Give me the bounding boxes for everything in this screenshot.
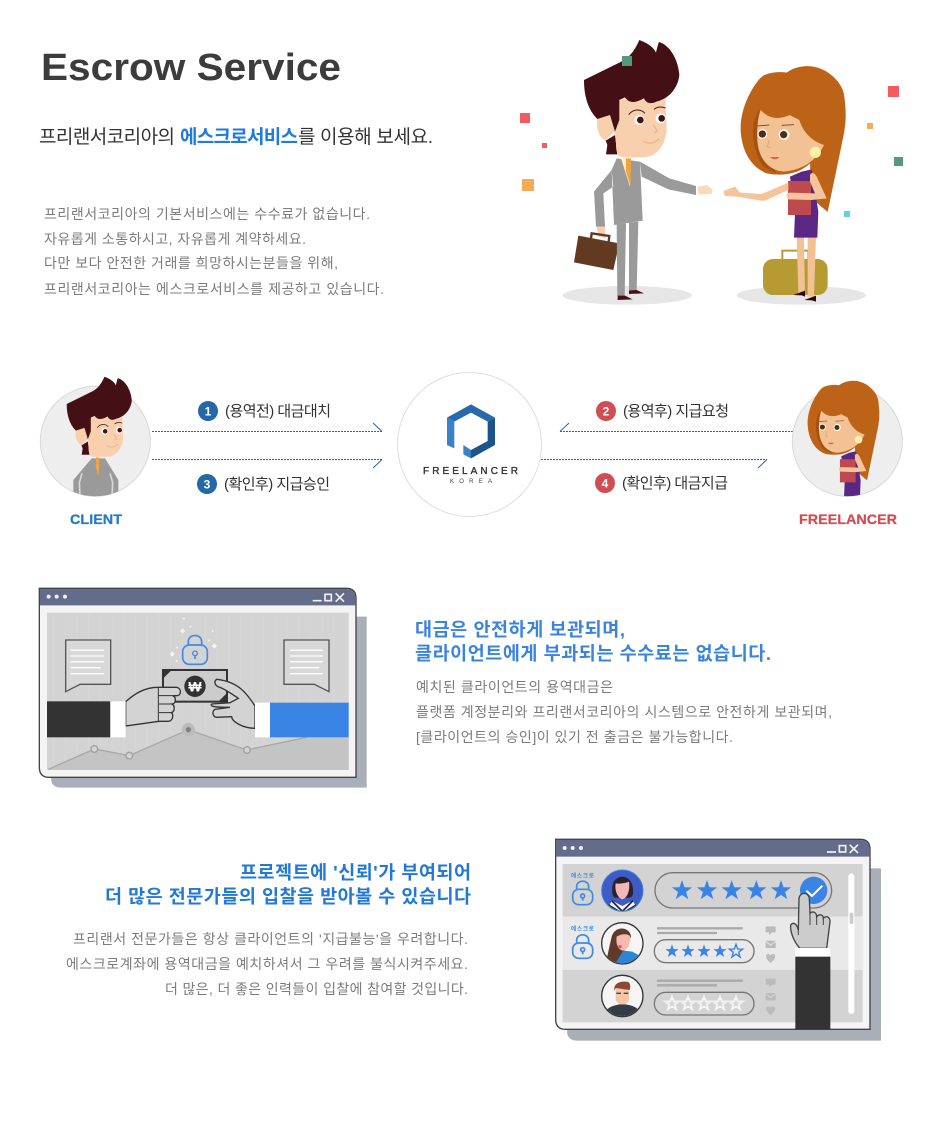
section heading: trust [105,862,471,907]
arrow: platform to freelancer [541,460,767,468]
step 4 label: 4 [602,476,609,490]
window illustration: rating list [556,839,881,1041]
row 1 escrow badge [571,871,594,905]
man character [563,40,713,305]
row 2 escrow badge: 에스크로 [571,924,594,932]
client avatar [40,377,150,497]
subtitle: 에스크로서비스 [180,126,298,148]
arrow: client to platform bottom [152,460,382,468]
row 3 contact icons [766,979,776,1015]
section text: safe custody [416,679,832,745]
section text: trust: 더 많은, 더 좋은 인력들이 입찰에 참여할 것입니다. [165,981,468,997]
platform logo circle: KOREA [450,479,492,485]
row 3 rating pill [654,992,754,1015]
section text: safe custody: 예치된 클라이언트의 용역대금은 [416,679,613,695]
step 4 label: (확인후) 대금지급 [622,475,728,492]
label: freelancer: FREELANCER [799,511,897,527]
arrow: client to platform top [152,423,382,432]
hero illustration: handshake [520,40,903,305]
woman character [723,66,866,305]
row 2 rating pill [654,940,754,963]
subtitle [39,126,433,148]
subtitle: 를 이용해 보세요. [298,126,433,148]
row 2 contact icons [766,926,776,963]
freelancer avatar [792,381,902,498]
section heading: trust: 더 많은 전문가들의 입찰을 받아볼 수 있습니다 [105,886,471,907]
section text: trust [66,931,468,997]
row 1 escrow badge: 에스크로 [571,871,594,879]
client hand with dark sleeve [47,687,180,737]
step 2 label: 2 [603,404,610,418]
confetti squares [520,56,903,217]
line chart [48,723,349,770]
scrollbar [848,873,854,1014]
label: client: CLIENT [70,511,122,527]
step 3 label: (확인후) 지급승인 [224,476,330,493]
intro text block: 프리랜서코리아의 기본서비스에는 수수료가 없습니다. [44,206,370,222]
section heading: trust: 프로젝트에 '신뢰'가 부여되어 [240,862,471,883]
section text: safe custody: [클라이언트의 승인]이 있기 전 출금은 불가능합니다. [416,729,733,745]
arrow: freelancer to platform [560,423,793,432]
row 3 portrait [602,975,643,1017]
intro text block: 다만 보다 안전한 거래를 희망하시는분들을 위해, [44,255,338,271]
platform logo circle: FREELANCER [423,466,518,477]
section heading: safe custody [415,619,771,664]
subtitle: 프리랜서코리아의 [39,126,175,148]
intro text block: 프리랜서코리아는 에스크로서비스를 제공하고 있습니다. [44,281,384,297]
freelancer hand with blue sleeve [211,679,349,737]
window illustration: escrow hands [39,588,367,788]
row 2 text lines [657,928,743,933]
step 3 label [197,474,330,494]
row 1 rating pill [655,873,832,908]
pointing hand with dark sleeve [791,893,830,1029]
step 4 label [595,473,728,493]
step 1 label: (용역전) 대금대치 [225,403,331,420]
step 2 label [596,401,729,421]
section text: trust: 프리랜서 전문가들은 항상 클라이언트의 '지급불능'을 우려합니다. [73,931,468,947]
icon: lock with sparkles [170,618,217,664]
icon: won banknote [163,670,227,702]
section heading: safe custody: 클라이언트에게 부과되는 수수료는 없습니다. [415,643,771,664]
intro text block: 자유롭게 소통하시고, 자유롭게 계약하세요. [44,231,306,247]
step 1 label: 1 [205,404,212,418]
section text: trust: 에스크로계좌에 용역대금을 예치하셔서 그 우려를 불식시켜주세요. [66,956,468,972]
platform logo circle [398,372,542,516]
icon: won banknote: ₩ [188,678,202,694]
intro text block [44,206,384,297]
speech bubble left [66,640,111,692]
step 1 label [198,401,331,421]
row 3 text lines [657,981,743,985]
row 2 escrow badge [571,924,594,958]
step 3 label: 3 [204,478,211,492]
title: Escrow Service [41,47,341,89]
section text: safe custody: 플랫폼 계정분리와 프리랜서코리아의 시스템으로 안전하게 보관되며, [416,704,832,720]
speech bubble right [284,640,329,692]
section heading: safe custody: 대금은 안전하게 보관되며, [415,619,625,640]
row 2 portrait [602,923,643,967]
step 2 label: (용역후) 지급요청 [623,403,729,420]
row 1 portrait [602,870,643,912]
